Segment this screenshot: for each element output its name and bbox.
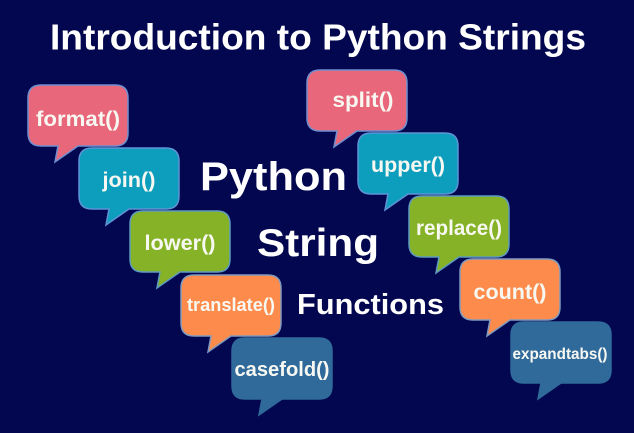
bubble: lower(): lower() — [144, 232, 216, 255]
bubble: casefold(): casefold() — [234, 359, 330, 381]
bubble: count() — [460, 259, 560, 336]
bubble: split(): split() — [332, 89, 394, 112]
bubble: translate(): translate() — [187, 295, 275, 315]
heading: Functions: Functions — [297, 289, 444, 321]
heading: String: String — [257, 222, 379, 265]
bubble: upper(): upper() — [371, 154, 445, 177]
title: Introduction to Python Strings — [50, 16, 586, 58]
heading: Python: Python — [200, 155, 347, 199]
bubble: format() — [28, 85, 128, 162]
bubble: split() — [307, 70, 407, 147]
bubble: replace(): replace() — [416, 217, 502, 240]
bubble: join(): join() — [101, 169, 156, 192]
bubble: translate() — [181, 275, 281, 352]
bubble: upper() — [358, 133, 458, 210]
bubble: expandtabs() — [511, 322, 611, 399]
bubble: expandtabs(): expandtabs() — [512, 346, 608, 363]
bubble: join() — [79, 148, 179, 225]
bubble: format(): format() — [36, 108, 120, 131]
bubble: casefold() — [232, 338, 332, 415]
bubble: count(): count() — [474, 281, 546, 304]
bubble: replace() — [409, 196, 509, 273]
bubble: lower() — [130, 211, 230, 288]
